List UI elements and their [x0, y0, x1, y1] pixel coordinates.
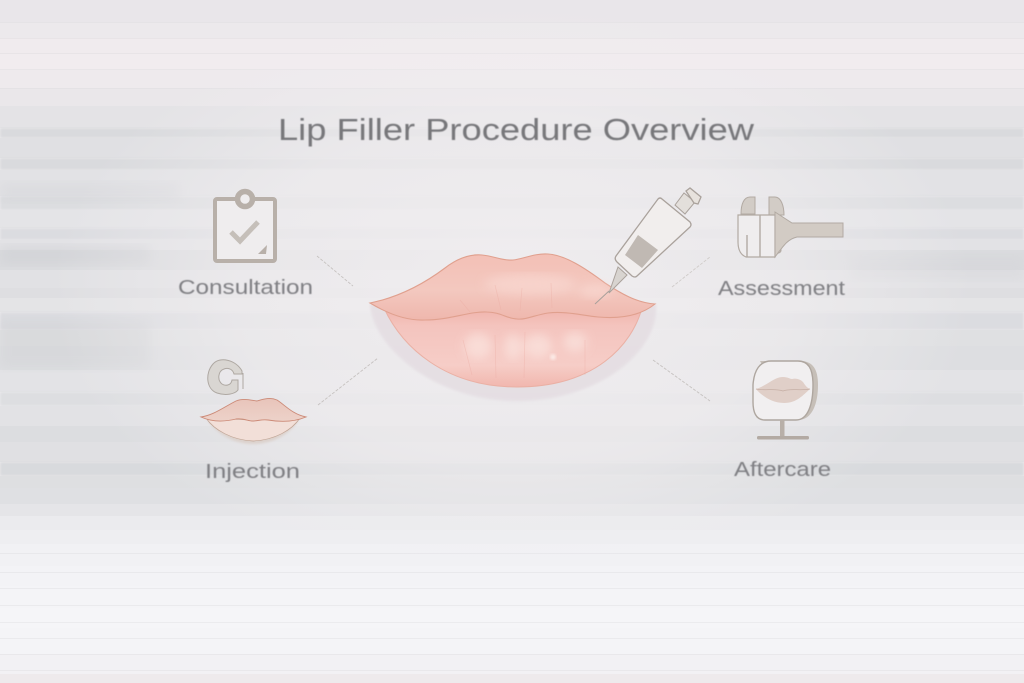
- syringe cap: [686, 188, 701, 204]
- lips shadow: [370, 304, 656, 401]
- assessment step: [718, 197, 846, 300]
- lower lip: [384, 300, 642, 387]
- connector: assessment to lips: [672, 257, 710, 287]
- upper lip: [370, 254, 655, 320]
- consultation step: [178, 192, 313, 299]
- icon: small syringe ring: [208, 360, 243, 394]
- label: aftercare: Aftercare: [734, 459, 831, 481]
- lip crease lines: [460, 283, 585, 378]
- title: Lip Filler Procedure Overview: [278, 112, 755, 147]
- label: assessment: Assessment: [718, 278, 846, 300]
- lower lip highlights: [464, 332, 587, 360]
- label: injection: Injection: [205, 461, 300, 483]
- upper lip highlights: [484, 274, 611, 298]
- syringe: [595, 188, 701, 304]
- icon: measuring calipers: [738, 197, 843, 257]
- syringe hub: [609, 267, 627, 293]
- syringe label: [625, 235, 658, 268]
- aftercare step: [734, 361, 831, 481]
- syringe needle: [595, 291, 609, 304]
- lower lip glint: [550, 354, 556, 360]
- central lips illustration: [370, 254, 656, 401]
- connector: aftercare to lips: [653, 360, 710, 401]
- syringe body: [615, 198, 691, 277]
- injection step: [201, 360, 306, 483]
- connector: consultation to lips: [317, 256, 353, 286]
- icon: small lips: [201, 398, 306, 444]
- icon: mirror: [753, 361, 818, 440]
- icon: clipboard: [215, 192, 275, 261]
- label: consultation: Consultation: [178, 277, 313, 299]
- connector: injection to lips: [318, 358, 378, 405]
- syringe neck: [675, 193, 695, 214]
